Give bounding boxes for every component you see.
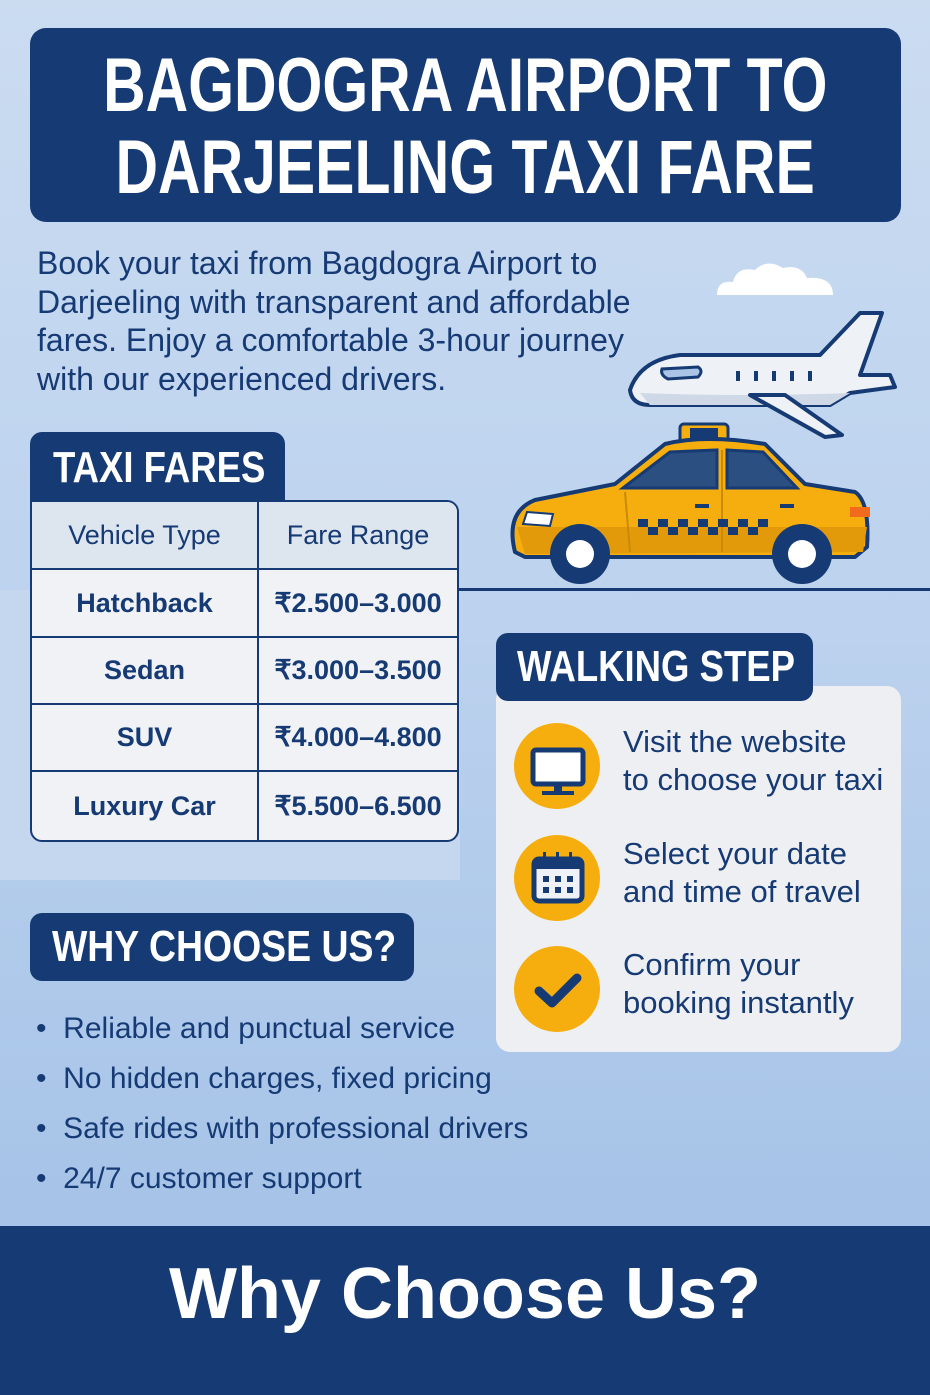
intro text: Book your taxi from Bagdogra Airport to bbox=[37, 245, 597, 281]
icon: taxi car bbox=[510, 422, 870, 584]
intro text: Darjeeling with transparent and affordable bbox=[37, 284, 631, 320]
fare table: ₹5.500–6.500 bbox=[274, 791, 442, 821]
step 3 bbox=[514, 946, 854, 1032]
step 2: and time of travel bbox=[623, 874, 861, 909]
benefits list: • No hidden charges, fixed pricing bbox=[36, 1062, 492, 1095]
step 1: Visit the website bbox=[623, 724, 846, 759]
icon: cloud bbox=[717, 264, 833, 295]
heading: taxi fares bbox=[30, 432, 285, 504]
title: DARJEELING TAXI FARE bbox=[116, 125, 815, 210]
intro text: fares. Enjoy a comfortable 3-hour journey bbox=[37, 322, 624, 358]
fare table: Luxury Car bbox=[73, 791, 216, 821]
fare table bbox=[30, 500, 459, 842]
step 3: booking instantly bbox=[623, 985, 854, 1020]
icon: airplane bbox=[628, 311, 897, 439]
icon: calendar bbox=[514, 835, 600, 921]
footer banner: Why Choose Us? bbox=[169, 1254, 761, 1334]
icon: checkmark bbox=[514, 946, 600, 1032]
intro text: with our experienced drivers. bbox=[37, 360, 446, 396]
step 2: Select your date bbox=[623, 836, 847, 871]
title bbox=[30, 28, 901, 222]
fare table: Vehicle Type bbox=[68, 520, 221, 550]
benefits list: • 24/7 customer support bbox=[36, 1162, 362, 1195]
intro text bbox=[37, 245, 631, 396]
fare table: Hatchback bbox=[76, 588, 213, 618]
fare table: ₹3.000–3.500 bbox=[274, 655, 442, 685]
fare table: SUV bbox=[117, 722, 172, 752]
heading: walking step bbox=[496, 633, 813, 701]
step 1 bbox=[514, 723, 883, 809]
panel: taxi fares bbox=[30, 432, 459, 842]
benefits list: • Safe rides with professional drivers bbox=[36, 1112, 528, 1145]
icon: monitor bbox=[514, 723, 600, 809]
fare table: Fare Range bbox=[287, 520, 429, 550]
heading: taxi fares: TAXI FARES bbox=[53, 443, 265, 492]
step 2 bbox=[514, 835, 861, 921]
title: BAGDOGRA AIRPORT TO bbox=[103, 43, 828, 128]
heading: why choose us bbox=[30, 913, 414, 981]
heading: why choose us: WHY CHOOSE US? bbox=[52, 922, 396, 971]
panel: walking step bbox=[496, 633, 901, 1052]
fare table: ₹2.500–3.000 bbox=[274, 588, 442, 618]
benefits list bbox=[36, 1012, 528, 1195]
fare table: ₹4.000–4.800 bbox=[274, 722, 442, 752]
fare table: Sedan bbox=[104, 655, 185, 685]
footer banner bbox=[0, 1226, 930, 1395]
step 1: to choose your taxi bbox=[623, 762, 883, 797]
heading: walking step: WALKING STEP bbox=[517, 642, 795, 691]
step 3: Confirm your bbox=[623, 947, 800, 982]
benefits list: • Reliable and punctual service bbox=[36, 1012, 455, 1045]
